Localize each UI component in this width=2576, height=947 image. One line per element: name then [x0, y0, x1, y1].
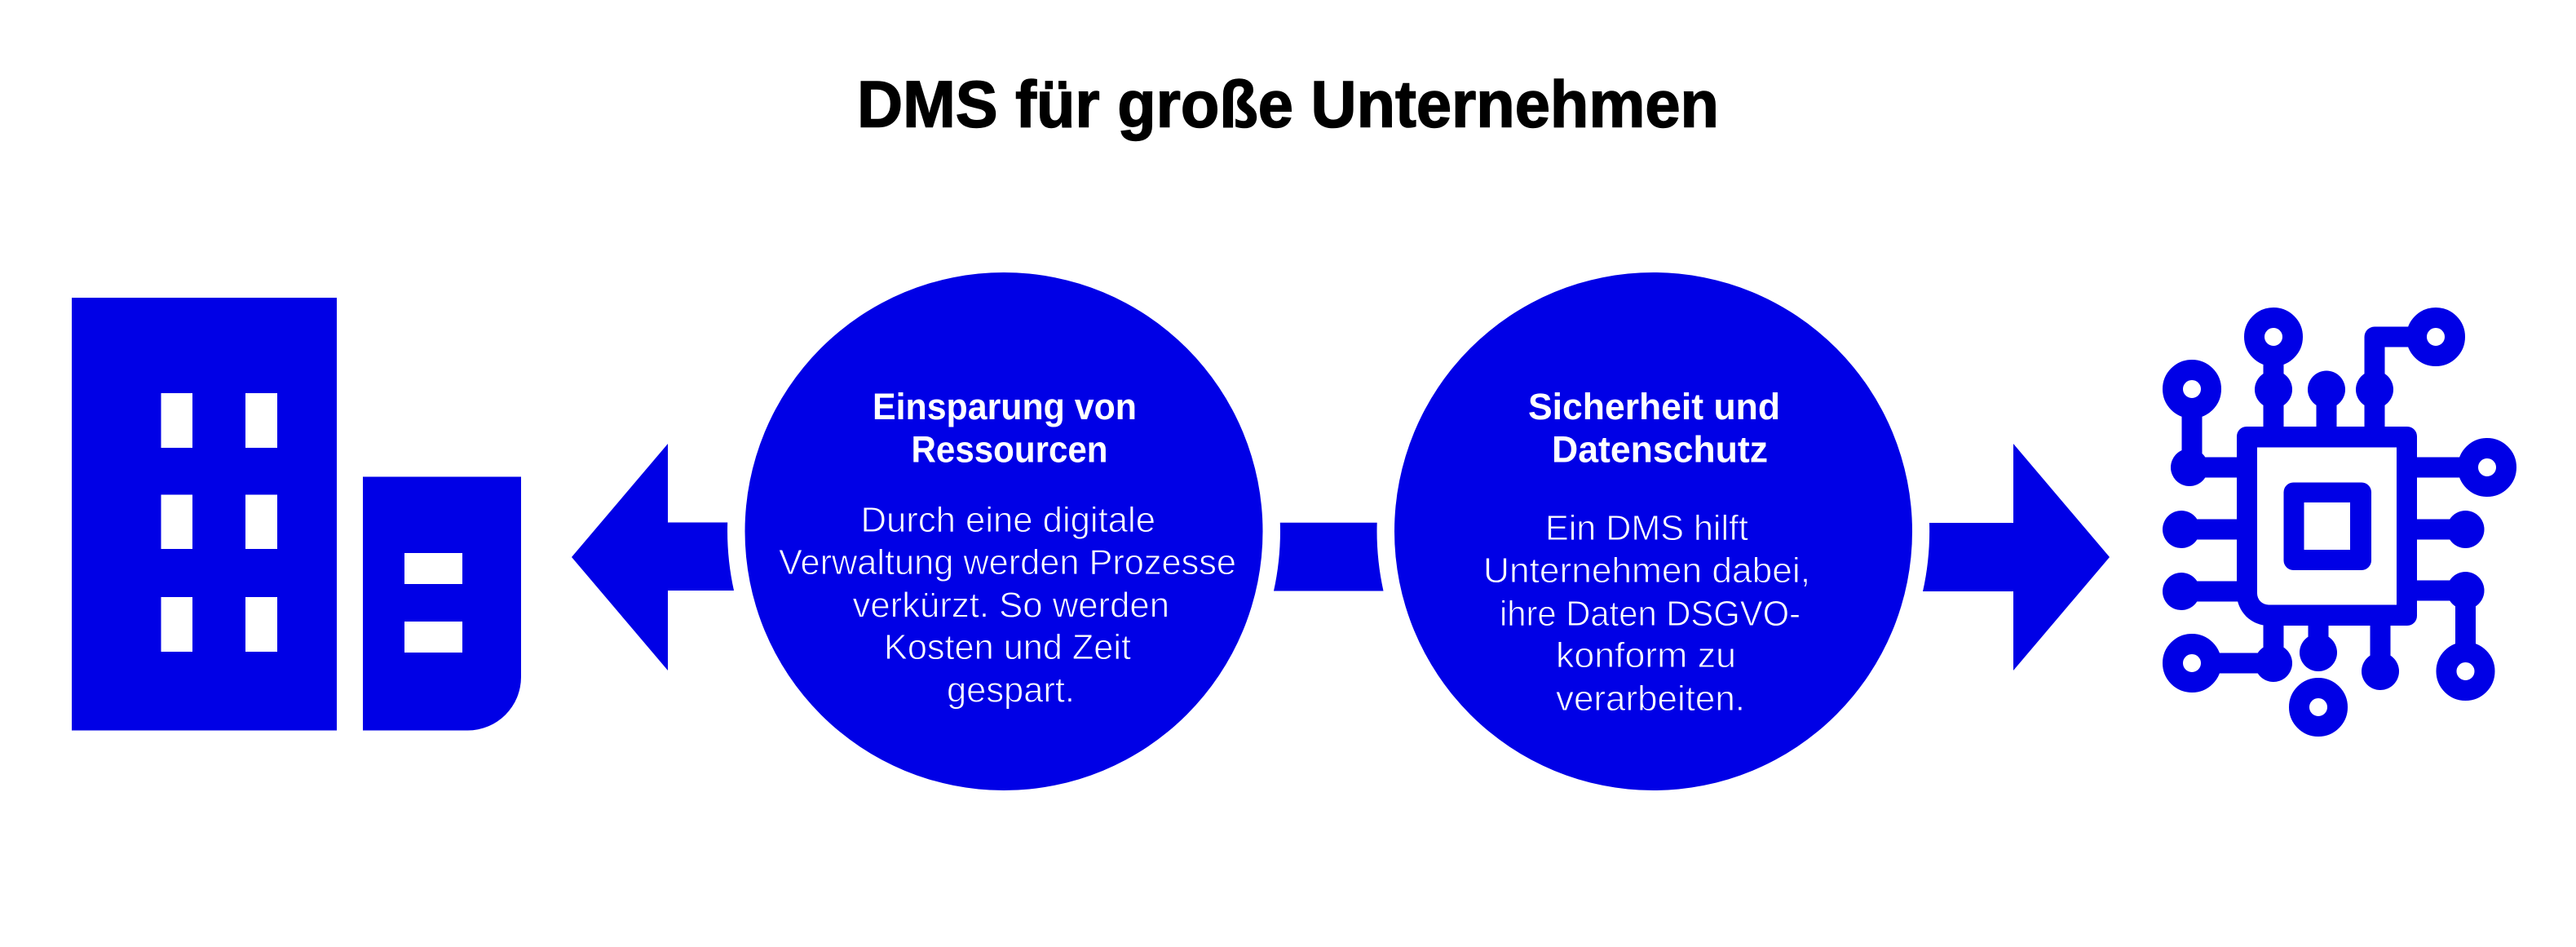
body text: resources	[779, 500, 1236, 710]
panel: Einsparung von Ressourcen	[745, 272, 1262, 790]
body text: resources: verkürzt. So werden	[853, 586, 1169, 625]
panel: Sicherheit und Datenschutz	[1394, 272, 1912, 790]
body text: security	[1483, 508, 1810, 719]
heading: Sicherheit und Datenschutz: Sicherheit und	[1528, 386, 1780, 427]
arrow: right towards chip	[1923, 444, 2110, 670]
icon: office buildings	[72, 298, 521, 731]
title: DMS für große Unternehmen	[857, 69, 1719, 142]
ring contact pads	[2172, 318, 2507, 726]
body text: resources: Verwaltung werden Prozesse	[779, 542, 1236, 582]
circuit traces	[2181, 337, 2487, 671]
body text: security: konform zu	[1556, 635, 1736, 675]
body text: security: verarbeiten.	[1556, 679, 1745, 719]
heading: Einsparung von Ressourcen: Ressourcen	[912, 429, 1107, 470]
heading: Sicherheit und Datenschutz	[1528, 386, 1780, 470]
body text: resources: gespart.	[947, 670, 1075, 710]
heading: Einsparung von Ressourcen: Einsparung von	[873, 386, 1137, 427]
chip inner window	[2257, 447, 2397, 605]
chip core	[2283, 483, 2371, 570]
body text: security: ihre Daten DSGVO-	[1500, 594, 1801, 634]
heading: Einsparung von Ressourcen	[873, 386, 1137, 470]
small building	[363, 476, 521, 731]
arrow: left towards buildings	[572, 444, 734, 670]
heading: Sicherheit und Datenschutz: Datenschutz	[1552, 429, 1768, 470]
body text: security: Unternehmen dabei,	[1483, 551, 1810, 591]
solid contact pads	[2163, 370, 2484, 690]
icon: microchip circuit	[2163, 318, 2507, 726]
body text: resources: Durch eine digitale	[861, 500, 1155, 540]
tall building	[72, 298, 337, 731]
chip body	[2237, 427, 2417, 626]
body text: resources: Kosten und Zeit	[884, 627, 1131, 667]
body text: security: Ein DMS hilft	[1545, 508, 1748, 548]
connector bar between circles	[1274, 523, 1383, 591]
